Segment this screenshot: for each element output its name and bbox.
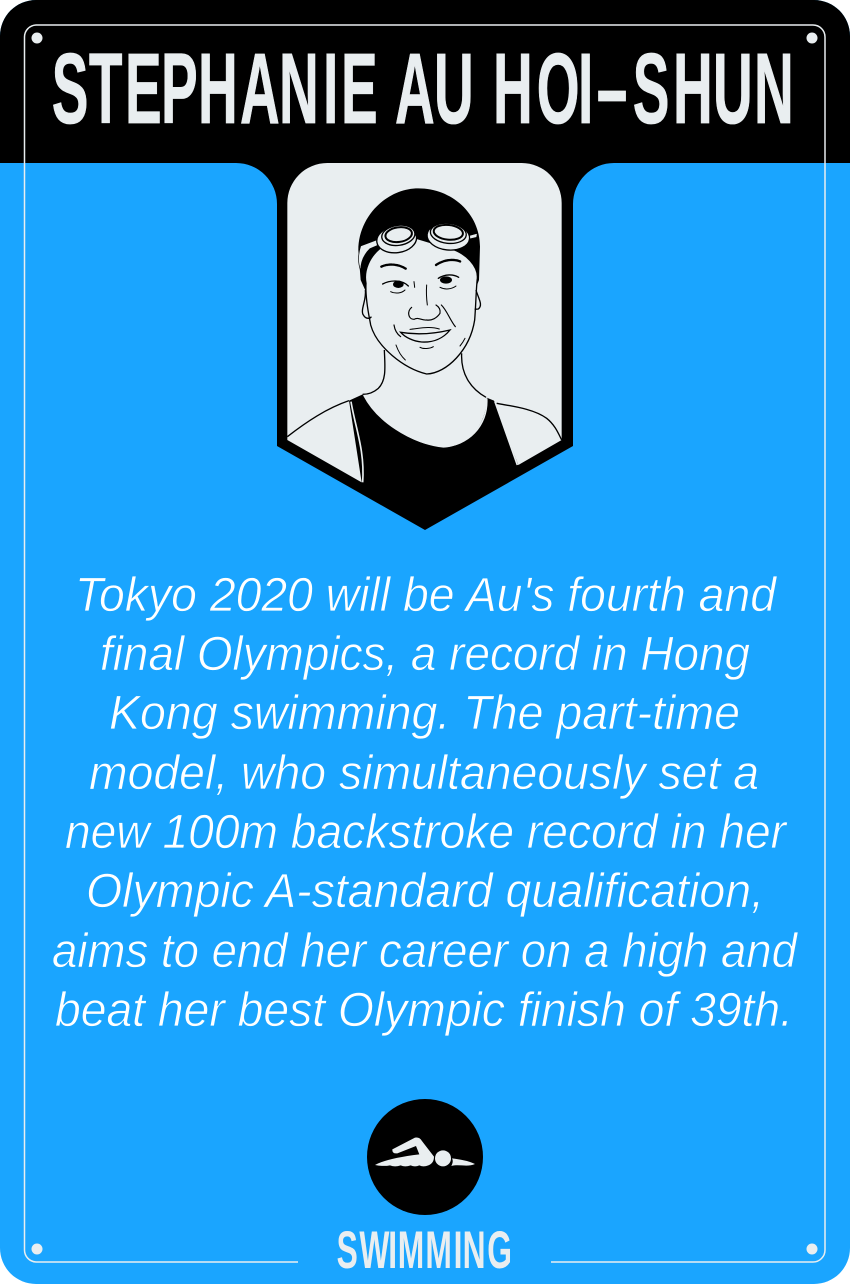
eyes <box>393 276 452 288</box>
facial features <box>381 260 465 360</box>
goggle strap <box>359 233 477 271</box>
text block: athlete description: aims to end her career on a high and <box>52 925 798 978</box>
title: athlete name: STEPHANIE AU HOI–SHUN <box>52 34 794 145</box>
portrait panel <box>287 163 562 482</box>
text block: athlete description <box>52 569 798 1037</box>
swimsuit <box>349 394 518 497</box>
panel: black header band with portrait tab <box>0 0 850 530</box>
smile <box>401 330 450 342</box>
text block: athlete description: Kong swimming. The part-time <box>109 687 740 740</box>
text block: athlete description: model, who simultaneously set a <box>89 747 759 800</box>
text block: athlete description: final Olympics, a record in Hong <box>100 628 750 681</box>
icon: swimming pictogram in black circle <box>367 1099 483 1215</box>
text block: athlete description: new 100m backstroke record in her <box>65 806 788 859</box>
swim cap <box>358 188 480 293</box>
goggles <box>375 221 471 255</box>
face and neck outline <box>365 238 477 374</box>
swimsuit trim <box>351 395 517 482</box>
ears, neck, shoulders <box>287 290 562 440</box>
label: sport name: SWIMMING <box>337 1221 512 1280</box>
text block: athlete description: Olympic A-standard qualification, <box>86 865 764 918</box>
portrait: line drawing of swimmer <box>287 163 562 497</box>
text block: athlete description: Tokyo 2020 will be Au's fourth and <box>75 569 777 622</box>
text block: athlete description: beat her best Olympic finish of 39th. <box>55 984 793 1037</box>
